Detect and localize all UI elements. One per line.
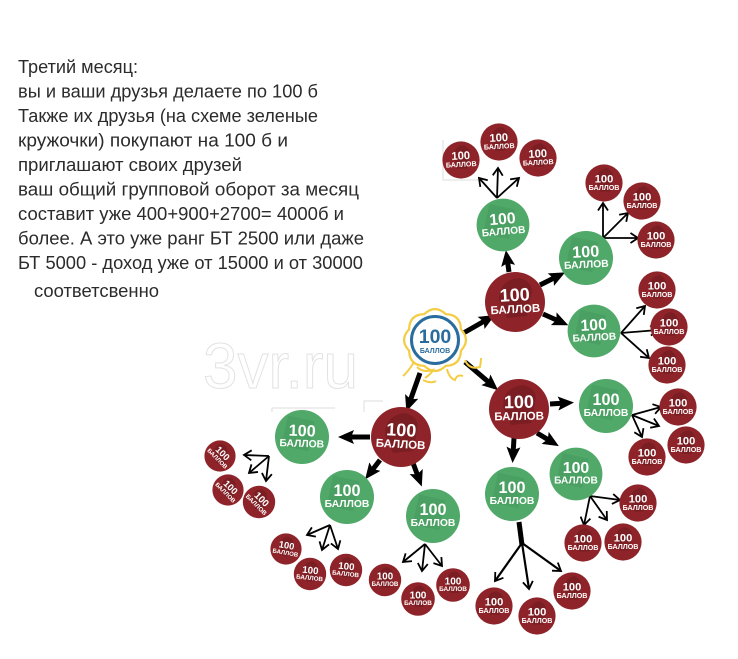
description text: более. А это уже ранг БТ 2500 или даже [18,228,364,248]
small red nodes: lower centre group: 100 [377,571,393,582]
small red nodes: mid right group: 100 [677,435,695,447]
small red nodes: far left group: БАЛЛОВ [213,482,236,505]
green node lower centre: 100 [419,501,447,519]
description text: Третий месяц: [18,57,138,77]
small red nodes: far left group: 100 [252,490,271,509]
small red nodes: upper right group: БАЛЛОВ [641,241,671,249]
small red nodes: lower right group: БАЛЛОВ [623,504,653,512]
thick arrows [346,258,566,545]
green node upper right: БАЛЛОВ [564,259,609,272]
description text: ваш общий групповой оборот за месяц [18,180,359,200]
small red nodes: top group: 100 [489,132,508,145]
small red nodes: bottom group: 100 [528,606,546,618]
small red nodes: mid right group: БАЛЛОВ [671,446,701,454]
description text [18,57,364,301]
small red nodes: lower right group: БАЛЛОВ [568,544,598,552]
badge: your 100 points: 100 [419,326,451,348]
small red nodes: right group [638,271,688,384]
big red node 1: 100 [499,284,530,306]
green node mid right: БАЛЛОВ [584,408,628,419]
small red nodes: lower centre group: 100 [445,576,462,587]
small red nodes: mid right group: 100 [638,447,656,459]
green node lower left: 100 [333,482,361,500]
green node lower right: БАЛЛОВ [554,476,598,487]
badge: your 100 points [403,309,481,382]
small red nodes: lower left group: БАЛЛОВ [272,548,299,559]
small red nodes: right group: 100 [658,355,676,367]
small red nodes: bottom group: БАЛЛОВ [522,617,552,625]
small red nodes: right group: БАЛЛОВ [652,366,682,374]
big red node 3: 100 [386,419,417,441]
small red nodes: mid right group: БАЛЛОВ [663,408,693,416]
thin arrows [244,168,661,589]
small red nodes: far left group: БАЛЛОВ [244,493,268,517]
small red nodes: lower left group: 100 [278,539,295,552]
small red nodes: right group: БАЛЛОВ [654,328,684,336]
big red node 1: БАЛЛОВ [490,303,541,317]
small red nodes: lower centre group [369,564,470,616]
small red nodes: bottom group: 100 [485,596,503,608]
small red nodes: top group: 100 [451,150,470,163]
small red nodes: mid right group: БАЛЛОВ [632,458,662,466]
small red nodes: lower right group: 100 [614,532,632,544]
small red nodes: top group: БАЛЛОВ [523,158,554,168]
description text: вы и ваши друзья делаете по 100 б [18,82,318,102]
green node bottom: БАЛЛОВ [490,496,534,507]
green node lower right [550,448,602,500]
faint leftover marks [272,140,478,412]
small red nodes: lower right group [564,484,657,562]
small red nodes: upper right group: БАЛЛОВ [627,202,657,210]
small red nodes: bottom group [475,572,591,635]
green node bottom [485,467,539,521]
small red nodes: bottom group: БАЛЛОВ [479,607,509,615]
small red nodes: lower left group: 100 [338,561,355,573]
green node top: 100 [489,210,517,229]
small red nodes: right group: БАЛЛОВ [642,291,672,299]
small red nodes: lower right group: БАЛЛОВ [608,543,638,551]
small red nodes: upper right group: 100 [633,191,651,203]
small red nodes: top group: БАЛЛОВ [484,142,515,152]
green node left [275,410,329,464]
small red nodes: mid right group [628,388,705,476]
big red node 3: БАЛЛОВ [375,438,426,452]
badge: your 100 points: БАЛЛОВ [420,348,450,355]
green node left: БАЛЛОВ [279,438,324,451]
small red nodes: upper right group: 100 [647,230,665,242]
small red nodes: bottom group: 100 [563,581,581,593]
small red nodes: lower centre group: БАЛЛОВ [404,600,432,607]
small red nodes: top group [442,123,557,179]
green node upper right: 100 [572,242,600,262]
small red nodes: far left group: 100 [221,478,240,497]
small red nodes: lower centre group: 100 [410,590,427,601]
description text: составит уже 400+900+2700= 4000б и [18,204,344,224]
green node right [568,305,620,357]
green node upper right [559,231,613,285]
small red nodes: top group: БАЛЛОВ [446,160,477,170]
green node top [477,199,529,251]
green node mid right: 100 [592,391,620,409]
watermark: 3vr.ru [203,330,358,402]
green node lower centre: БАЛЛОВ [411,518,455,529]
small red nodes: far left group: 100 [213,444,232,463]
small red nodes: upper right group: 100 [595,173,613,185]
big red node 1 [485,272,545,332]
small red nodes: upper right group [585,164,675,259]
big red node 3 [371,407,431,467]
big red node 2: БАЛЛОВ [494,411,544,423]
small red nodes: lower centre group: БАЛЛОВ [439,586,467,593]
green node right: 100 [580,316,608,335]
small red nodes: bottom group: БАЛЛОВ [557,592,587,600]
small red nodes: lower right group: 100 [629,493,647,505]
description text: кружочки) покупают на 100 б и [18,130,288,150]
small red nodes: lower left group: 100 [302,565,319,577]
small red nodes: mid right group: 100 [669,397,687,409]
small red nodes: top group: 100 [528,148,547,161]
green node top: БАЛЛОВ [481,225,526,240]
description text: Также их друзья (на схеме зеленые [18,106,318,126]
green node right: БАЛЛОВ [572,332,616,345]
small red nodes: lower left group: БАЛЛОВ [332,570,360,579]
green node mid right [579,379,633,433]
small red nodes: upper right group: БАЛЛОВ [589,184,619,192]
big red node 2 [489,379,549,439]
green node lower left: БАЛЛОВ [325,499,369,510]
small red nodes: far left group: БАЛЛОВ [205,448,228,471]
description text: приглашают своих друзей [18,155,242,175]
small red nodes: lower left group: БАЛЛОВ [296,574,324,583]
small red nodes: far left group [204,440,275,518]
description text: соответсвенно [34,281,159,301]
small red nodes: lower centre group: БАЛЛОВ [372,581,399,588]
green node bottom: 100 [498,479,526,497]
green node left: 100 [288,422,316,441]
big red node 2: 100 [504,392,534,412]
small red nodes: right group: 100 [648,280,666,292]
green node lower centre [406,489,460,543]
green node lower right: 100 [563,460,589,477]
green node lower left [320,470,374,524]
small red nodes: right group: 100 [660,317,678,329]
description text: БТ 5000 - доход уже от 15000 и от 30000 [18,253,363,273]
small red nodes: lower left group [270,533,362,590]
small red nodes: lower right group: 100 [574,533,592,545]
